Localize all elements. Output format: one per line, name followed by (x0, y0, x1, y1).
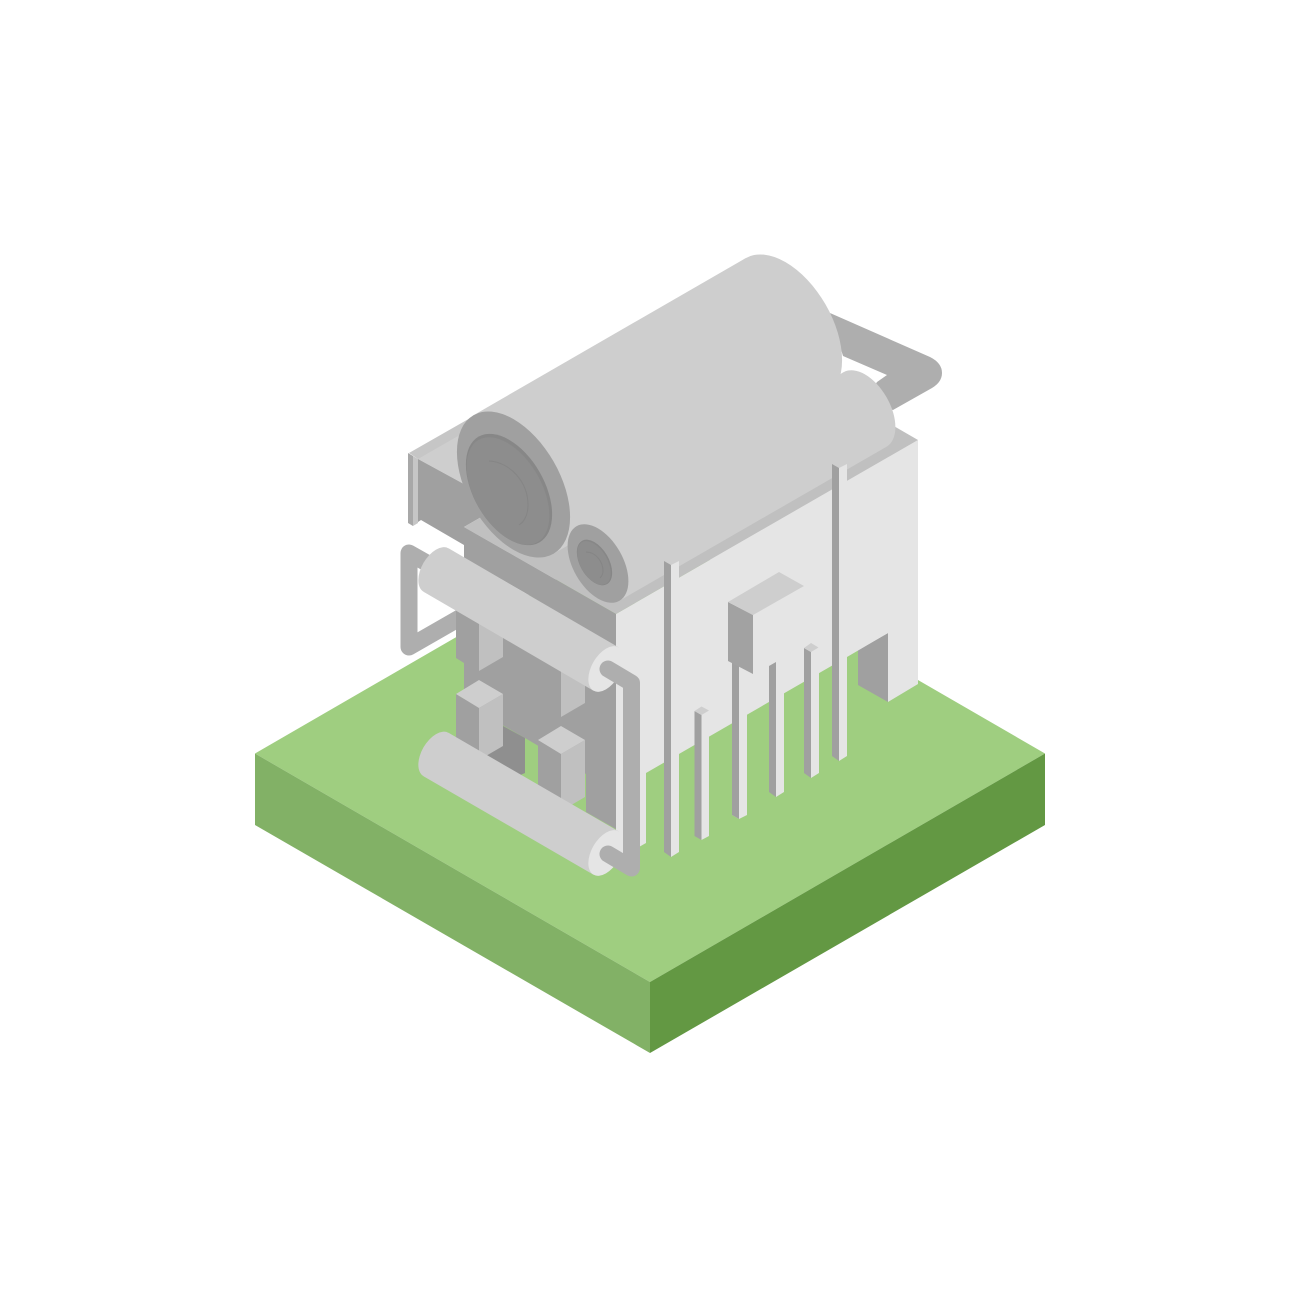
top left housing (408, 417, 490, 545)
left pipe frame (409, 553, 470, 647)
right pipe frame (608, 669, 632, 868)
pillar 1 (664, 561, 679, 857)
machinery box left (456, 680, 503, 760)
roof front fascia (464, 527, 616, 645)
small cylinder end cap (555, 514, 641, 613)
upper roller (411, 541, 631, 698)
building wall with legs (616, 440, 918, 860)
green ground base (255, 525, 1045, 1053)
large cylinder tank (474, 235, 866, 554)
lower machinery block (456, 570, 616, 829)
lower roller (411, 726, 631, 882)
small cylinder tank (576, 360, 908, 601)
machinery box right (538, 726, 585, 811)
pillar 5 (804, 643, 819, 778)
pillar 6 (832, 464, 847, 761)
pillar 4 (769, 658, 784, 797)
roof (464, 320, 918, 614)
wall mounted box (728, 572, 804, 819)
large cylinder end cap (433, 392, 594, 577)
pillar 2 (694, 706, 709, 840)
back pipe loop (830, 313, 942, 410)
